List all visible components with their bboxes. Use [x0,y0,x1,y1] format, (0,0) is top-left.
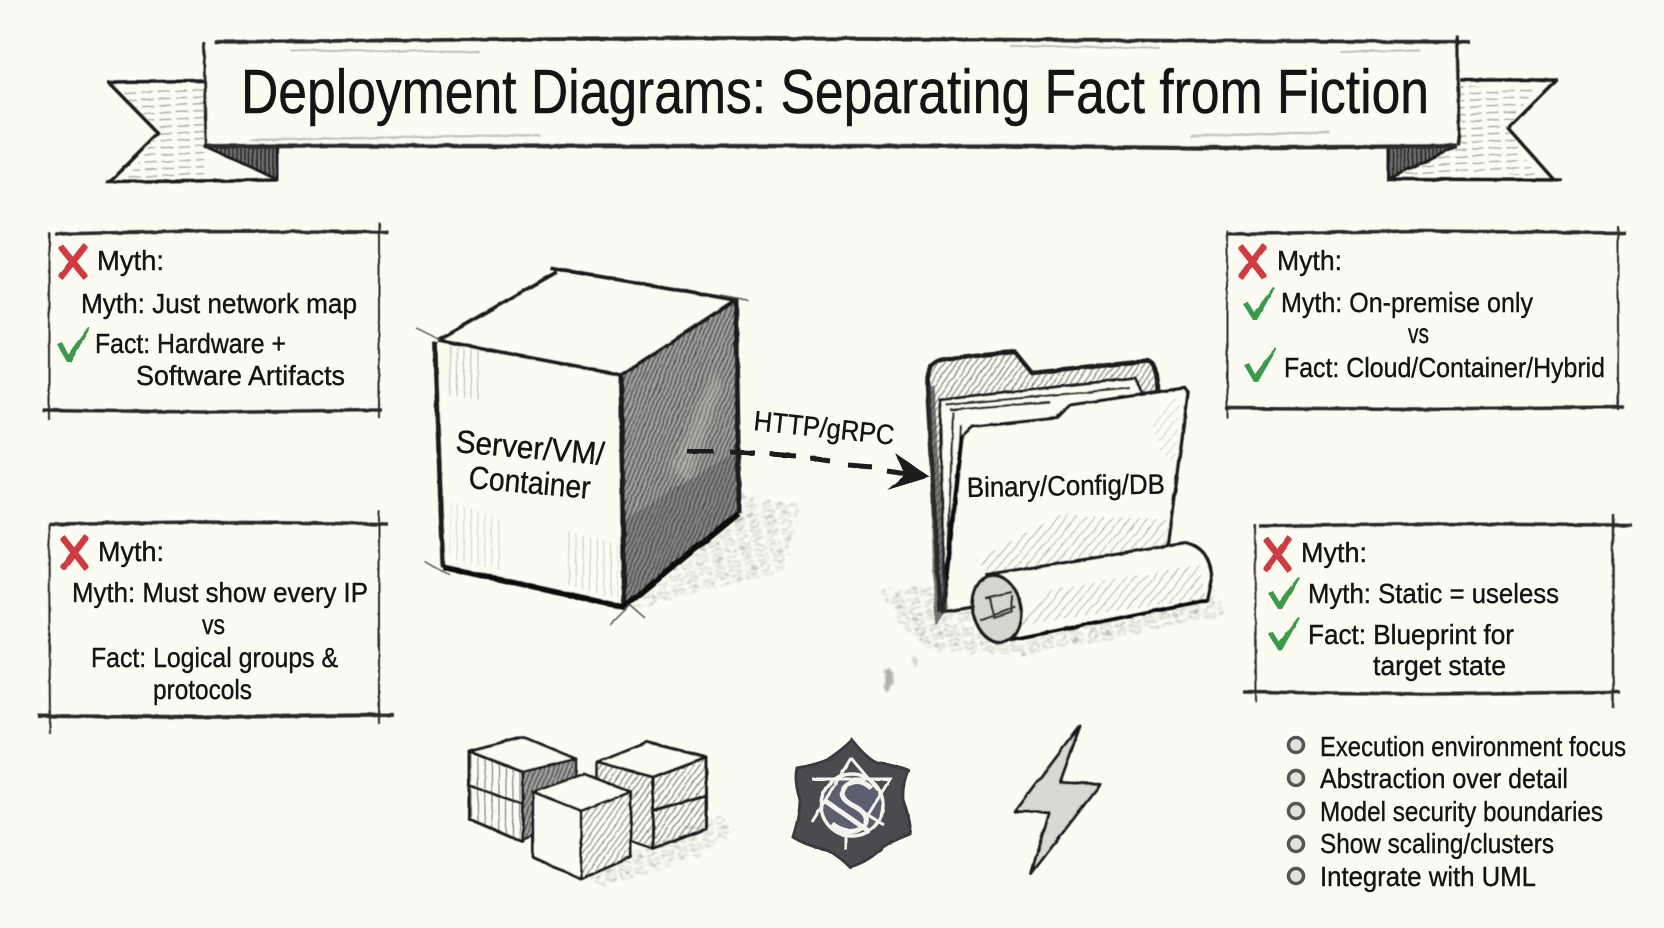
banner body [204,35,1470,148]
arrow protocol label: HTTP/gRPC [752,405,896,451]
left ribbon tail [106,81,277,182]
fact statement: Fact: Blueprint for [1308,619,1514,650]
title text: Deployment Diagrams: Separating Fact from Fiction [241,58,1429,127]
myth heading: Myth: [1277,245,1342,276]
fact statement: Fact: Cloud/Container/Hybrid [1284,352,1605,383]
icon: green check [57,327,90,362]
fact statement continued: Software Artifacts [136,360,345,391]
myth heading: Myth: [98,536,164,567]
fact statement continued: protocols [153,674,252,705]
title banner [106,35,1562,182]
versus: vs [1408,318,1429,349]
myth statement: Myth: Must show every IP [72,577,368,608]
ground shadow [880,585,1225,655]
fact statement: Fact: Logical groups & [91,642,338,673]
cube label line two: Container [467,459,592,506]
checklist of best practices [1288,731,1626,892]
myth statement: Myth: Just network map [81,288,357,319]
rolled scroll [966,543,1212,647]
bullet item: Show scaling/clusters [1320,828,1554,859]
icon: red x [62,536,87,569]
myth statement: Myth: Static = useless [1308,578,1559,609]
versus: vs [202,609,225,640]
bullet item: Abstraction over detail [1320,763,1568,794]
folder and scroll [880,352,1225,655]
icon: container cubes [469,737,735,885]
panel: myth on-premise only [1225,226,1626,418]
panel: myth static useless [1243,514,1632,708]
icon: green check [1244,348,1277,382]
dashed arrow [687,451,930,490]
icon: badge with star and s [793,740,910,867]
box outline [1243,514,1632,708]
icon: green check [1268,617,1300,650]
cube shadow [630,495,800,610]
myth statement: Myth: On-premise only [1281,287,1533,318]
myth heading: Myth: [97,245,164,276]
folder label: Binary/Config/DB [967,469,1165,503]
server cube [416,268,800,625]
bullet item: Model security boundaries [1320,796,1603,827]
icon: red x [1240,245,1265,278]
panel: myth must show every ip [38,510,394,734]
icon: red x [1265,537,1290,571]
smudge [884,657,917,693]
fact statement: Fact: Hardware + [95,328,286,359]
box outline [42,222,388,420]
icon: lightning bolt [1015,726,1100,874]
folder shapes [927,352,1212,647]
bullet item: Integrate with UML [1320,861,1536,892]
fact statement continued: target state [1373,650,1506,681]
icon: green check [1243,287,1275,320]
panel: myth just network map [42,222,388,420]
myth heading: Myth: [1301,537,1367,568]
right ribbon tail [1388,80,1562,180]
icon: red x [60,245,86,278]
cube faces [416,268,748,625]
box outline [1225,226,1626,418]
cube label line one: Server/VM/ [454,423,606,472]
box outline [38,510,394,734]
icon: green check [1268,577,1300,609]
